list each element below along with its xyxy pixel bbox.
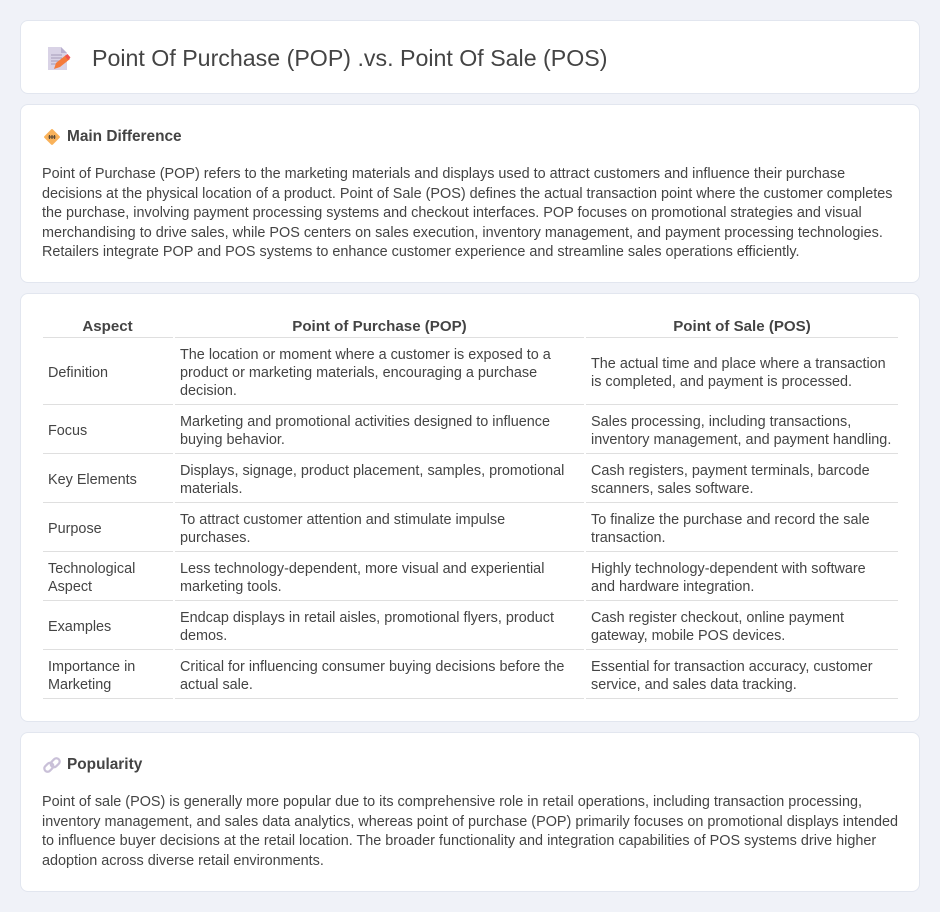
row: technological aspect: Aspect [48, 579, 92, 595]
key elements POS [591, 463, 870, 497]
technological aspect POS: and hardware integration. [591, 579, 754, 595]
key elements POS: Cash registers, payment terminals, barcode [591, 463, 870, 479]
text block: main difference: merchandising to drive sales, while POS centers on sales execution, inventory management, and payment processing technologies. [42, 225, 883, 241]
text block: main difference: the purchase, involving payment processing systems and checkout interfaces. POP focuses on promotional strategies and visual [42, 205, 862, 221]
row: importance in marketing: Importance in [48, 659, 135, 675]
table header: point of sale: Point of Sale (POS) [673, 318, 811, 335]
definition POP [180, 347, 551, 399]
row: importance in marketing [48, 659, 135, 693]
key elements POP: materials. [180, 481, 242, 497]
importance POP [180, 659, 564, 693]
table header: aspect: Aspect [82, 318, 133, 335]
examples POP [180, 610, 554, 644]
purpose POS: To finalize the purchase and record the sale [591, 512, 870, 528]
definition POS: The actual time and place where a transaction [591, 356, 886, 372]
panel: comparison table [20, 293, 920, 722]
text block: popularity: to influence buyer decisions at the retail location. The broader functionality and integration capabilities of POS systems drive higher [42, 833, 876, 849]
row: technological aspect: Technological [48, 561, 135, 577]
definition POP: The location or moment where a customer is exposed to a [180, 347, 551, 363]
focus POP: Marketing and promotional activities designed to influence [180, 414, 550, 430]
row: focus: Focus [48, 423, 87, 439]
icon: chain link [43, 757, 61, 773]
panel: main difference [20, 104, 920, 283]
technological aspect POS: Highly technology-dependent with software [591, 561, 866, 577]
importance POS [591, 659, 873, 693]
text block: main difference: decisions at the physical location of a product. Point of Sale (POS) defines the actual transaction point where the customer completes [42, 186, 892, 202]
purpose POS [591, 512, 870, 546]
focus POS [591, 414, 891, 448]
text block: popularity: Point of sale (POS) is generally more popular due to its comprehensive role in retail operations, including transaction processing, [42, 794, 862, 810]
technological aspect POP [180, 561, 544, 595]
key elements POP: Displays, signage, product placement, samples, promotional [180, 463, 564, 479]
purpose POP: purchases. [180, 530, 250, 546]
importance POP: Critical for influencing consumer buying decisions before the [180, 659, 564, 675]
importance POS: service, and sales data tracking. [591, 677, 797, 693]
importance POP: actual sale. [180, 677, 253, 693]
text block: main difference [42, 166, 892, 260]
focus POP: buying behavior. [180, 432, 285, 448]
text block: main difference: Retailers integrate POP and POS systems to enhance customer experience and streamline sales operations efficiently. [42, 244, 800, 260]
heading: main difference: Main Difference [67, 128, 182, 145]
row: examples: Examples [48, 619, 111, 635]
examples POS: Cash register checkout, online payment [591, 610, 844, 626]
examples POP: demos. [180, 628, 227, 644]
panel: title header [20, 20, 920, 94]
definition POP: product or marketing materials, encouraging a purchase [180, 365, 537, 381]
text block: popularity [42, 794, 898, 869]
title: Point Of Purchase (POP) .vs. Point Of Sale (POS) [92, 45, 607, 71]
importance POS: Essential for transaction accuracy, customer [591, 659, 873, 675]
row: importance in marketing: Marketing [48, 677, 111, 693]
row: key elements: Key Elements [48, 472, 137, 488]
technological aspect POS [591, 561, 866, 595]
definition POS [591, 356, 886, 390]
focus POP [180, 414, 550, 448]
technological aspect POP: marketing tools. [180, 579, 282, 595]
examples POS: gateway, mobile POS devices. [591, 628, 785, 644]
key elements POP [180, 463, 564, 497]
key elements POS: scanners, sales software. [591, 481, 754, 497]
icon: document with pencil [48, 47, 70, 70]
panel: popularity [20, 732, 920, 892]
text block: main difference: Point of Purchase (POP) refers to the marketing materials and displays used to attract customers and influence their purchase [42, 166, 845, 182]
row: technological aspect [48, 561, 135, 595]
definition POP: decision. [180, 383, 237, 399]
text block: popularity: adoption across diverse retail environments. [42, 853, 324, 869]
text block: popularity: inventory management, and sales data analytics, whereas point of purchase (POP) primarily focuses on promotional displays intended [42, 814, 898, 830]
technological aspect POP: Less technology-dependent, more visual and experiential [180, 561, 544, 577]
row: purpose: Purpose [48, 521, 102, 537]
table header: point of purchase: Point of Purchase (POP) [292, 318, 467, 335]
purpose POS: transaction. [591, 530, 665, 546]
focus POS: inventory management, and payment handling. [591, 432, 891, 448]
examples POP: Endcap displays in retail aisles, promotional flyers, product [180, 610, 554, 626]
purpose POP [180, 512, 505, 546]
purpose POP: To attract customer attention and stimulate impulse [180, 512, 505, 528]
icon: warning diamond [44, 129, 60, 145]
definition POS: is completed, and payment is processed. [591, 374, 852, 390]
row: definition: Definition [48, 365, 108, 381]
focus POS: Sales processing, including transactions, [591, 414, 851, 430]
heading: popularity: Popularity [67, 756, 142, 773]
examples POS [591, 610, 844, 644]
